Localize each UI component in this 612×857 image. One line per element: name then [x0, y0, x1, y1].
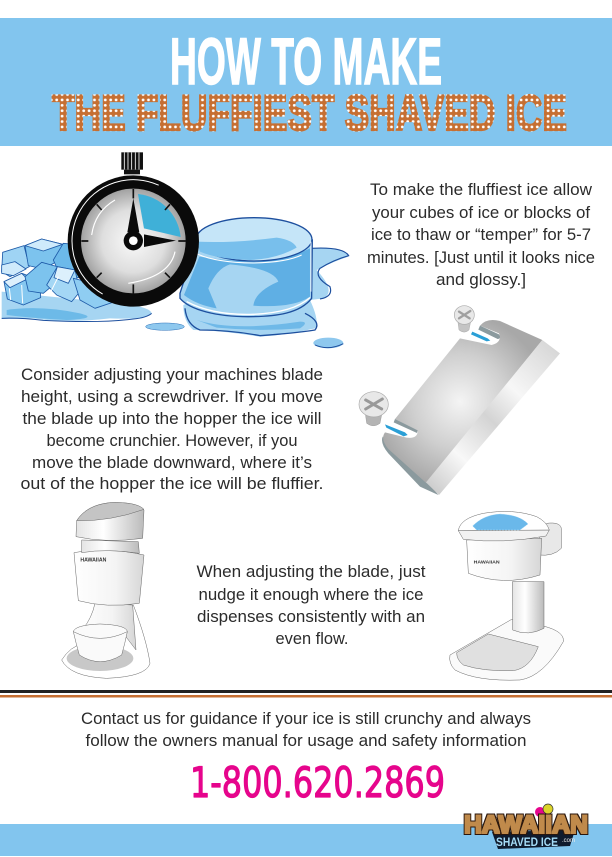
text: nudge the blade: nudge it enough where the ice — [198, 586, 424, 604]
text: adjust blade height: height, using a screwdriver. If you move — [21, 388, 323, 406]
machine head — [76, 503, 144, 540]
blade plate — [383, 320, 542, 483]
illustration: shaved ice machine with cup — [62, 503, 150, 678]
text: temper the ice — [367, 181, 595, 289]
cup — [73, 624, 127, 662]
ice block — [180, 240, 312, 317]
footer band — [0, 824, 612, 856]
stopwatch — [50, 152, 217, 325]
text: nudge the blade: dispenses consistently with an — [197, 608, 425, 626]
text: nudge the blade: even flow. — [276, 630, 348, 648]
text: adjust blade height: Consider adjusting your machines blade — [21, 366, 323, 384]
text: contact: Contact us for guidance if your ice is still crunchy and always — [81, 710, 531, 728]
cube highlights — [9, 277, 58, 303]
text: temper the ice: ice to thaw or “temper” for 5-7 — [371, 226, 591, 244]
divider lines — [0, 690, 612, 698]
text: contact — [81, 710, 531, 750]
text: adjust blade height: move the blade downward, where it’s — [32, 454, 312, 472]
header band — [0, 18, 612, 146]
right puddle — [183, 248, 348, 337]
text: temper the ice: and glossy.] — [436, 271, 526, 289]
text: adjust blade height: become crunchier. However, if you — [46, 432, 298, 450]
logo tagline: SHAVED ICE — [496, 835, 558, 849]
blue arrows — [471, 332, 490, 341]
ice cubes — [2, 239, 115, 308]
logo — [464, 804, 588, 849]
logo shaved ice badge — [492, 830, 575, 849]
illustration: shaved ice machine with hopper — [450, 511, 563, 680]
logo flowers — [535, 804, 553, 817]
text: temper the ice: To make the fluffiest ice allow — [370, 181, 592, 199]
screw bottom — [359, 392, 388, 426]
machine label: HAWAIIAN — [474, 559, 500, 565]
logo wordmark: HAWAIIAN — [464, 811, 588, 839]
illustration: blade and screws — [359, 306, 560, 495]
bowl — [467, 538, 542, 580]
column — [512, 582, 544, 633]
ticks — [81, 189, 186, 294]
text: contact: follow the owners manual for usage and safety information — [86, 732, 526, 750]
text: nudge the blade: When adjusting the blade, just — [196, 563, 426, 581]
text: adjust blade height — [20, 366, 324, 493]
text: nudge the blade — [196, 563, 426, 648]
logo dot com: .com — [562, 838, 575, 844]
rim — [458, 530, 549, 541]
machine logo: HAWAIIAN — [80, 558, 106, 564]
blade shadow edge — [382, 437, 438, 495]
blue ice — [473, 514, 528, 530]
text: temper the ice: your cubes of ice or blocks of — [372, 204, 591, 222]
illustration: melting ice and stopwatch — [2, 152, 349, 348]
text: adjust blade height: the blade up into the hopper the ice will — [22, 410, 322, 428]
left puddle — [2, 292, 152, 321]
screw top — [454, 306, 474, 332]
text: temper the ice: minutes. [Just until it looks nice — [367, 249, 595, 267]
text: adjust blade height: out of the hopper the ice will be fluffier. — [20, 475, 324, 493]
blade edge strip — [426, 340, 560, 495]
side latch — [538, 523, 561, 555]
machine body — [74, 550, 144, 605]
crown — [121, 152, 143, 174]
drops — [146, 323, 184, 330]
phone number: 1-800.620.2869 — [190, 758, 445, 807]
machine base — [62, 605, 150, 678]
stand base — [450, 619, 563, 680]
